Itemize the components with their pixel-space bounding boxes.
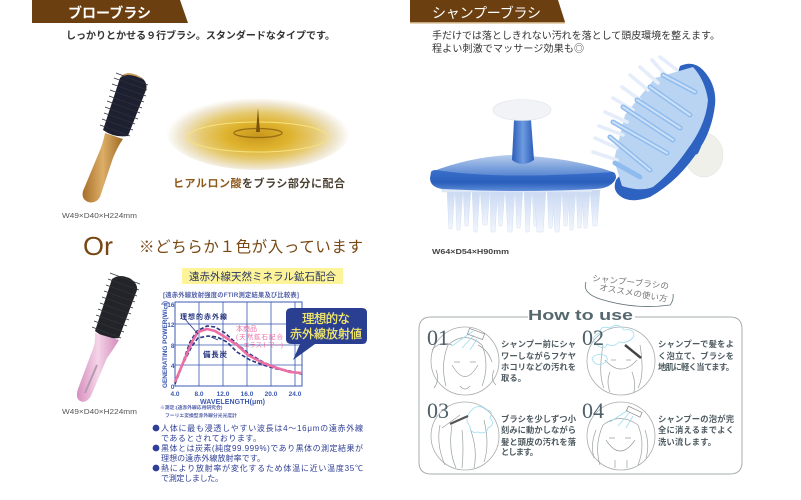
label: far infrared mineral (182, 268, 343, 284)
text: shampoo brush description: 程よい刺激でマッサージ効果も◎ (432, 42, 584, 55)
bullet notes: 熱により放射率が変化するため体温に近い温度35℃ (161, 463, 363, 473)
chart y axis: GENERATING POWER(W/㎠) (161, 301, 169, 388)
chart y axis: 0 (171, 384, 175, 391)
chart footnote: フーリエ変換型赤外線分光光度計 (165, 412, 237, 419)
step 04: 全に消えるまでよく (658, 425, 734, 435)
step 04: 04 (582, 398, 604, 423)
icon: pink blow brush (77, 273, 140, 402)
dimensions: wooden brush: W49×D40×H224mm (62, 211, 137, 220)
step 03: 刻みに動かしながら (501, 425, 576, 435)
step 03: とします。 (501, 447, 538, 457)
dimensions: shampoo brush: W64×D54×H90mm (432, 247, 509, 256)
step 02: 02 (582, 325, 604, 350)
bullet notes: で測定しました。 (161, 473, 223, 483)
chart footnote: ※測定:(遠赤外線応用研究会) (160, 404, 223, 411)
callout: ideal infrared: 理想的な (302, 311, 350, 326)
panel: how to use (419, 307, 742, 474)
chart x axis: 20.0 (265, 391, 278, 398)
callout: ideal infrared (286, 308, 367, 360)
step 02: 地肌に軽く当てます。 (658, 362, 734, 372)
icon: wooden blow brush (83, 73, 148, 202)
chart x axis: 24.0 (289, 391, 302, 398)
chart x axis: 4.0 (170, 391, 180, 398)
line chart: generating power by wavelength: 備長炭 (203, 349, 228, 359)
chart x axis (170, 391, 302, 406)
callout: ideal infrared: 赤外線放射値 (290, 326, 362, 341)
chart title: [遠赤外線放射強度のFTIR測定結果及び比較表] (163, 290, 299, 299)
caption: hyaluronic acid: ヒアルロン酸をブラシ部分に配合 (173, 176, 345, 190)
dimensions: pink brush: W49×D40×H224mm (62, 407, 137, 416)
step 01: シャンプー前にシャ (501, 339, 576, 349)
line chart: generating power by wavelength: 本商品 (236, 324, 257, 333)
banner: shampoo brush: シャンプーブラシ (432, 5, 541, 21)
text: shampoo brush description (432, 29, 720, 55)
step 03: 03 (427, 398, 449, 423)
step 04: シャンプーの泡が完 (658, 414, 734, 424)
bullet notes: 人体に最も浸透しやすい波長は4〜16μmの遠赤外線 (161, 423, 363, 433)
step 03: 髪と頭皮の汚れを落 (501, 437, 577, 447)
subheading: blow brush description: しっかりとかせる９行ブラシ。スタンダードなタイプです。 (66, 29, 335, 42)
heading: How to use: How to use (528, 307, 633, 324)
banner: blow brush: ブローブラシ (68, 5, 151, 21)
step 01: ワーしながらフケヤ (501, 351, 576, 361)
note: one of the colours: ※どちらか１色が入っています (139, 238, 363, 256)
step 02: シャンプーで髪をよ (658, 339, 734, 349)
caption: recommended use: シャンプーブラシの (592, 273, 669, 291)
line chart: generating power by wavelength: エラストマー) (243, 341, 283, 349)
caption: recommended use (585, 273, 673, 307)
chart x axis: WAVELENGTH(μm) (200, 399, 265, 406)
line chart: generating power by wavelength (175, 302, 302, 386)
chart x axis: 8.0 (194, 391, 204, 398)
bullet notes: であるとされております。 (161, 434, 261, 443)
bullet notes (153, 423, 363, 483)
icon: shampoo brush, side view (430, 100, 616, 232)
heading: Or: Or (83, 231, 113, 261)
icon: golden oil droplet (166, 94, 350, 170)
chart x axis: 16.0 (241, 391, 254, 398)
line chart: generating power by wavelength: (天然鉱石配合 (236, 332, 284, 341)
chart y axis (161, 301, 175, 391)
bullet notes: 理想の遠赤外線放射率です。 (161, 453, 265, 463)
step 01: ホコリなどの汚れを (501, 362, 576, 372)
label: far infrared mineral: 遠赤外線天然ミネラル鉱石配合 (189, 270, 336, 283)
banner: blow brush (32, 0, 188, 23)
step 01: 取る。 (501, 373, 526, 383)
step 02 (582, 325, 734, 395)
line chart: generating power by wavelength: 理想的赤外線 (180, 312, 227, 321)
step 04: 洗い流します。 (658, 437, 716, 447)
chart x axis: 12.0 (217, 391, 230, 398)
step 01 (427, 325, 576, 395)
chart y axis: 12 (167, 322, 175, 329)
banner: shampoo brush (410, 0, 565, 24)
chart footnote (160, 404, 237, 419)
step 04 (582, 398, 734, 470)
chart y axis: 16 (167, 302, 175, 309)
caption: recommended use: オススメの使い方 (599, 282, 669, 304)
chart y axis: 8 (171, 343, 175, 350)
icon: shampoo brush, bristle view (593, 57, 723, 200)
step 02: く泡立て、ブラシを (658, 351, 734, 361)
bullet notes: 黒体とは炭素(純度99.999%)であり黒体の測定結果が (161, 443, 363, 453)
chart y axis: 4 (171, 363, 175, 370)
step 01: 01 (427, 325, 449, 350)
step 03 (427, 398, 577, 470)
step 03: ブラシを少しずつ小 (501, 414, 577, 424)
text: shampoo brush description: 手だけでは落としきれない汚れを落として頭皮環境を整えます。 (432, 29, 720, 42)
